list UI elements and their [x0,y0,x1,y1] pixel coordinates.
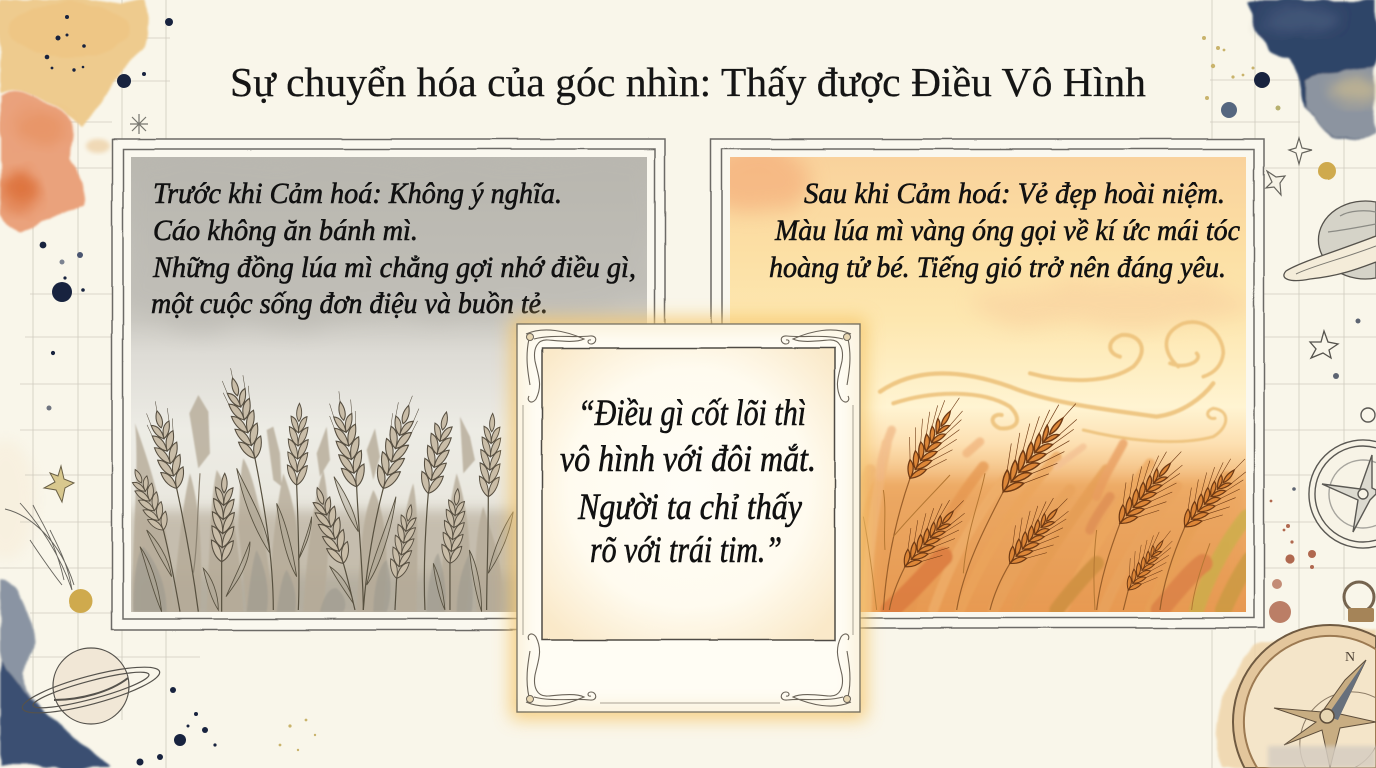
panel text: before: Cáo không ăn bánh mì. [153,214,418,247]
panel text: before: Những đồng lúa mì chẳng gợi nhớ điều gì, [152,251,636,284]
warm paper stain [0,440,36,560]
panel text: before [151,177,636,320]
icon: saturn top-right [1284,201,1376,281]
icon: tilted sparkle star [1266,171,1285,195]
brown splatter [1269,500,1316,623]
icon: comet [5,503,74,590]
blurred grain background [840,430,1250,610]
illustration: golden wheat field [730,157,1246,612]
watercolor: bottom-right tan [1216,628,1376,768]
corner ornaments [523,330,853,706]
frame: after [711,139,1264,628]
small ochre stain [86,139,110,153]
card glow [511,318,866,719]
panel text: after: Sau khi Cảm hoá: Vẻ đẹp hoài niệm. [804,177,1225,210]
grey wheat heads [126,365,503,580]
quote card [511,318,866,719]
quote text: “Điều gì cốt lõi thì [578,393,806,434]
panel: before [112,139,665,630]
icon: watercolor compass [1233,582,1376,768]
illustration: grey wheat field [125,150,655,630]
icon: watercolor compass: N [1345,650,1355,665]
quote text: rõ với trái tim.” [590,530,782,571]
watercolor: top-right navy [1246,0,1376,139]
icon: gold star [44,466,74,502]
golden wheat heads [889,386,1260,600]
quote text: vô hình với đôi mắt. [560,439,816,480]
icon: saturn bottom-left [19,648,163,724]
watercolor: top-left orange [0,95,87,232]
watercolor: top-left ochre [0,0,151,124]
icon: outline star [1310,331,1338,358]
background blades [133,395,502,612]
card body [517,324,860,712]
stems and leaves [163,458,488,612]
wind swirls [880,322,1226,442]
panel text: after: Màu lúa mì vàng óng gọi về kí ức mái tóc [774,214,1240,247]
quote text: Người ta chỉ thấy [577,487,802,528]
icon: asterisk star [130,114,148,134]
blurred corner smudge [1268,746,1376,768]
card inner wash [542,348,835,640]
panel text: after [769,177,1240,284]
panel text: after: hoàng tử bé. Tiếng gió trở nên đáng yêu. [769,251,1226,284]
icon: sketch compass [1309,408,1376,548]
icon: sparkle star [1289,138,1312,164]
panel text: before: Trước khi Cảm hoá: Không ý nghĩa. [153,177,562,210]
panel: after [705,139,1264,628]
panel text: before: một cuộc sống đơn điệu và buồn tẻ. [151,287,548,320]
stems [863,473,1210,610]
title: Sự chuyển hóa của góc nhìn: Thấy được Điều Vô Hình [230,59,1146,105]
quote text [560,393,816,571]
watercolor: bottom-left navy [0,580,112,768]
frame: before [112,139,665,630]
gold splats [69,162,1336,613]
gold speckles [279,36,1255,751]
